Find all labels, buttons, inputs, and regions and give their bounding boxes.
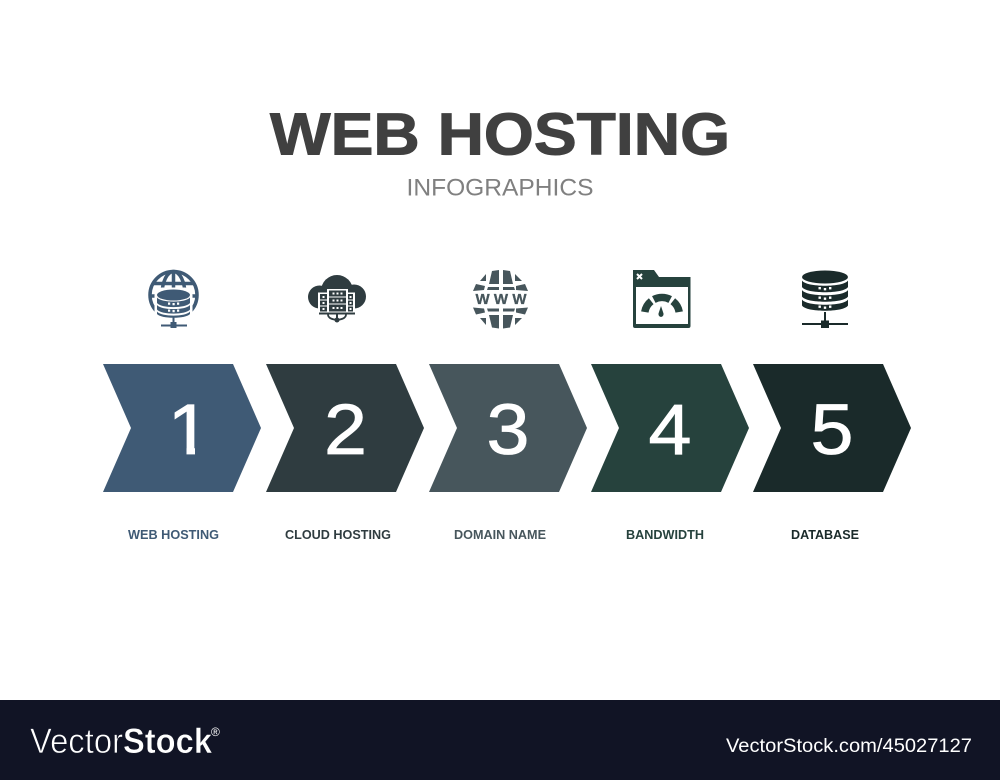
arrow 2: 2 xyxy=(324,391,367,470)
subtitle: INFOGRAPHICS xyxy=(406,174,594,202)
arrow 4: 4 xyxy=(648,391,692,470)
footer logo xyxy=(30,722,212,761)
arrow 5: 5 xyxy=(810,391,854,470)
arrow 3 xyxy=(429,364,587,492)
label: domain name: DOMAIN NAME xyxy=(454,527,546,542)
icon: www globe: WWW xyxy=(476,291,527,308)
icon: globe with database xyxy=(149,271,198,328)
footer logo: Vector xyxy=(30,722,123,761)
registered mark: ® xyxy=(211,725,220,739)
title: WEB HOSTING xyxy=(270,102,730,168)
footer logo: Stock xyxy=(123,722,212,761)
arrow 1 xyxy=(103,364,261,492)
label: cloud hosting: CLOUD HOSTING xyxy=(285,527,391,542)
footer bar xyxy=(0,700,1000,780)
label: web hosting: WEB HOSTING xyxy=(128,527,219,542)
arrow 2 xyxy=(266,364,424,492)
label: database: DATABASE xyxy=(791,527,859,542)
arrow 5 xyxy=(753,364,911,492)
icon: www globe xyxy=(473,270,528,328)
icon: cloud hosting xyxy=(308,275,366,322)
arrow 4 xyxy=(591,364,749,492)
arrow 3: 3 xyxy=(486,391,530,470)
icon: browser speedometer xyxy=(633,270,690,328)
label: bandwidth: BANDWIDTH xyxy=(626,527,704,542)
arrow 1: 1 xyxy=(168,391,211,470)
footer id: VectorStock.com/45027127 xyxy=(726,736,972,757)
icon: database xyxy=(802,270,848,328)
